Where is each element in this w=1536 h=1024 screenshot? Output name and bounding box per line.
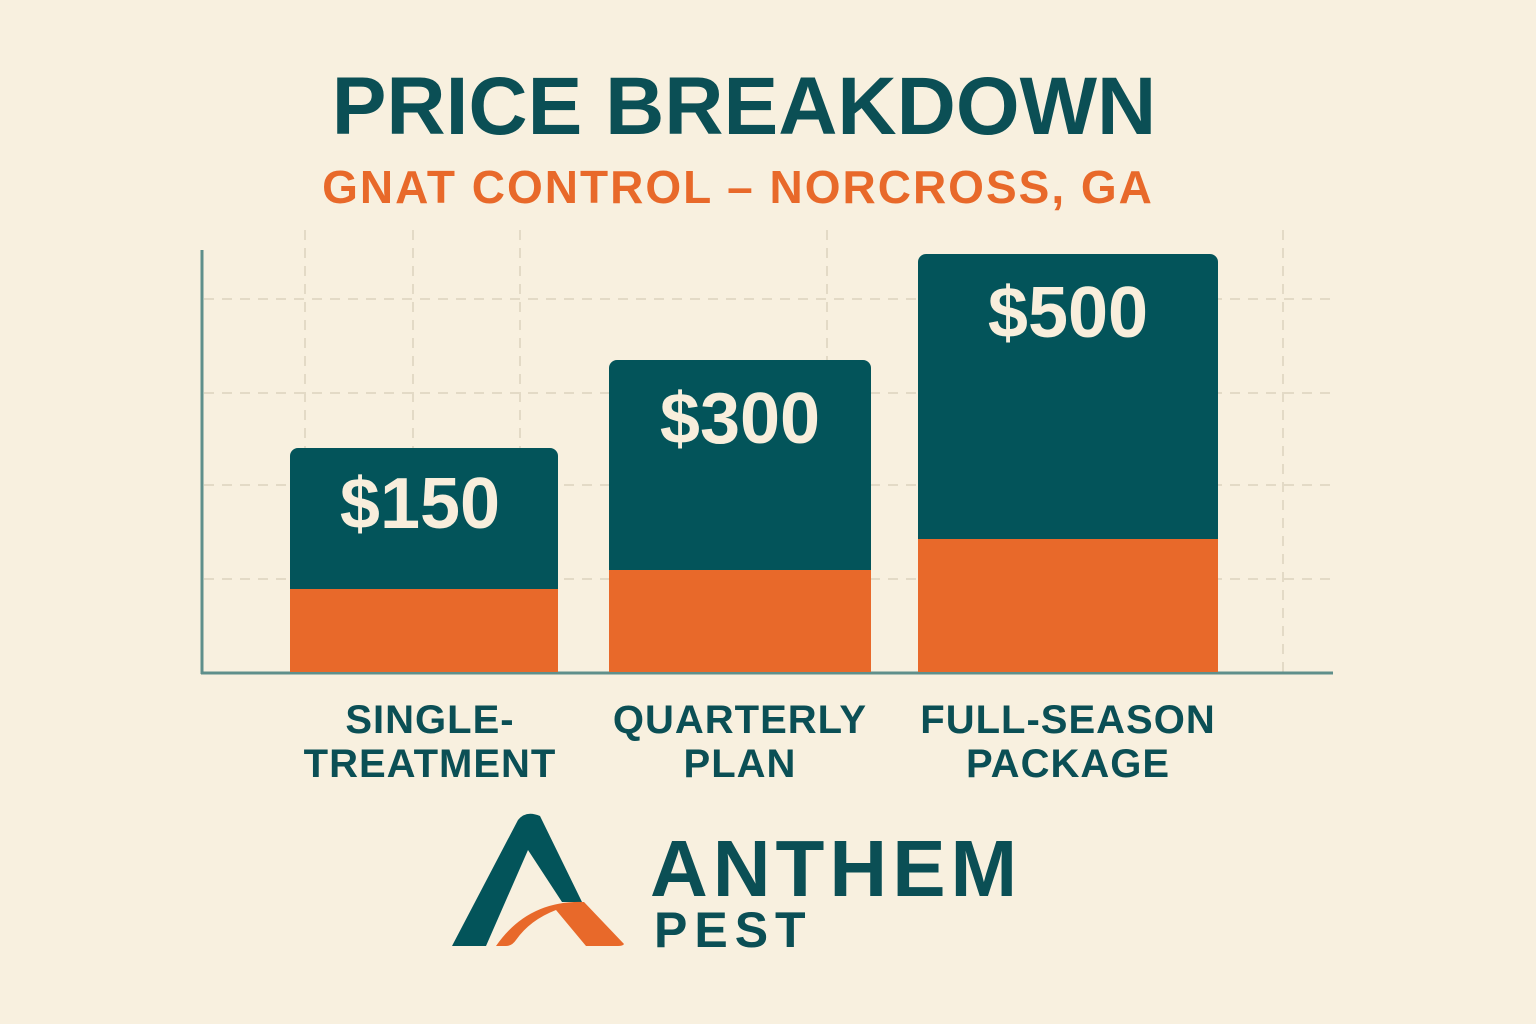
label: full season: [920, 698, 1216, 786]
logo: [452, 814, 1022, 958]
logo text: ANTHEM: [650, 824, 1022, 913]
bar: quarterly: $300: [660, 379, 820, 459]
bar: single treatment: $150: [340, 464, 500, 544]
bar: quarterly: [609, 360, 871, 672]
title: PRICE BREAKDOWN: [332, 61, 1156, 152]
label: quarterly: [613, 698, 867, 786]
label: quarterly: QUARTERLY: [613, 698, 867, 742]
label: single treatment: TREATMENT: [304, 742, 556, 786]
label: single treatment: [304, 698, 556, 786]
label: quarterly: PLAN: [684, 742, 796, 786]
bar: full season: $500: [988, 273, 1148, 353]
bar: single treatment: [290, 448, 558, 672]
bar: full season: [918, 254, 1218, 672]
subtitle: GNAT CONTROL – NORCROSS, GA: [322, 161, 1154, 213]
icon: A mark: [452, 814, 624, 946]
label: single treatment: SINGLE-: [345, 698, 515, 742]
label: full season: FULL-SEASON: [920, 698, 1216, 742]
label: full season: PACKAGE: [966, 742, 1170, 786]
logo: PEST: [654, 902, 813, 958]
